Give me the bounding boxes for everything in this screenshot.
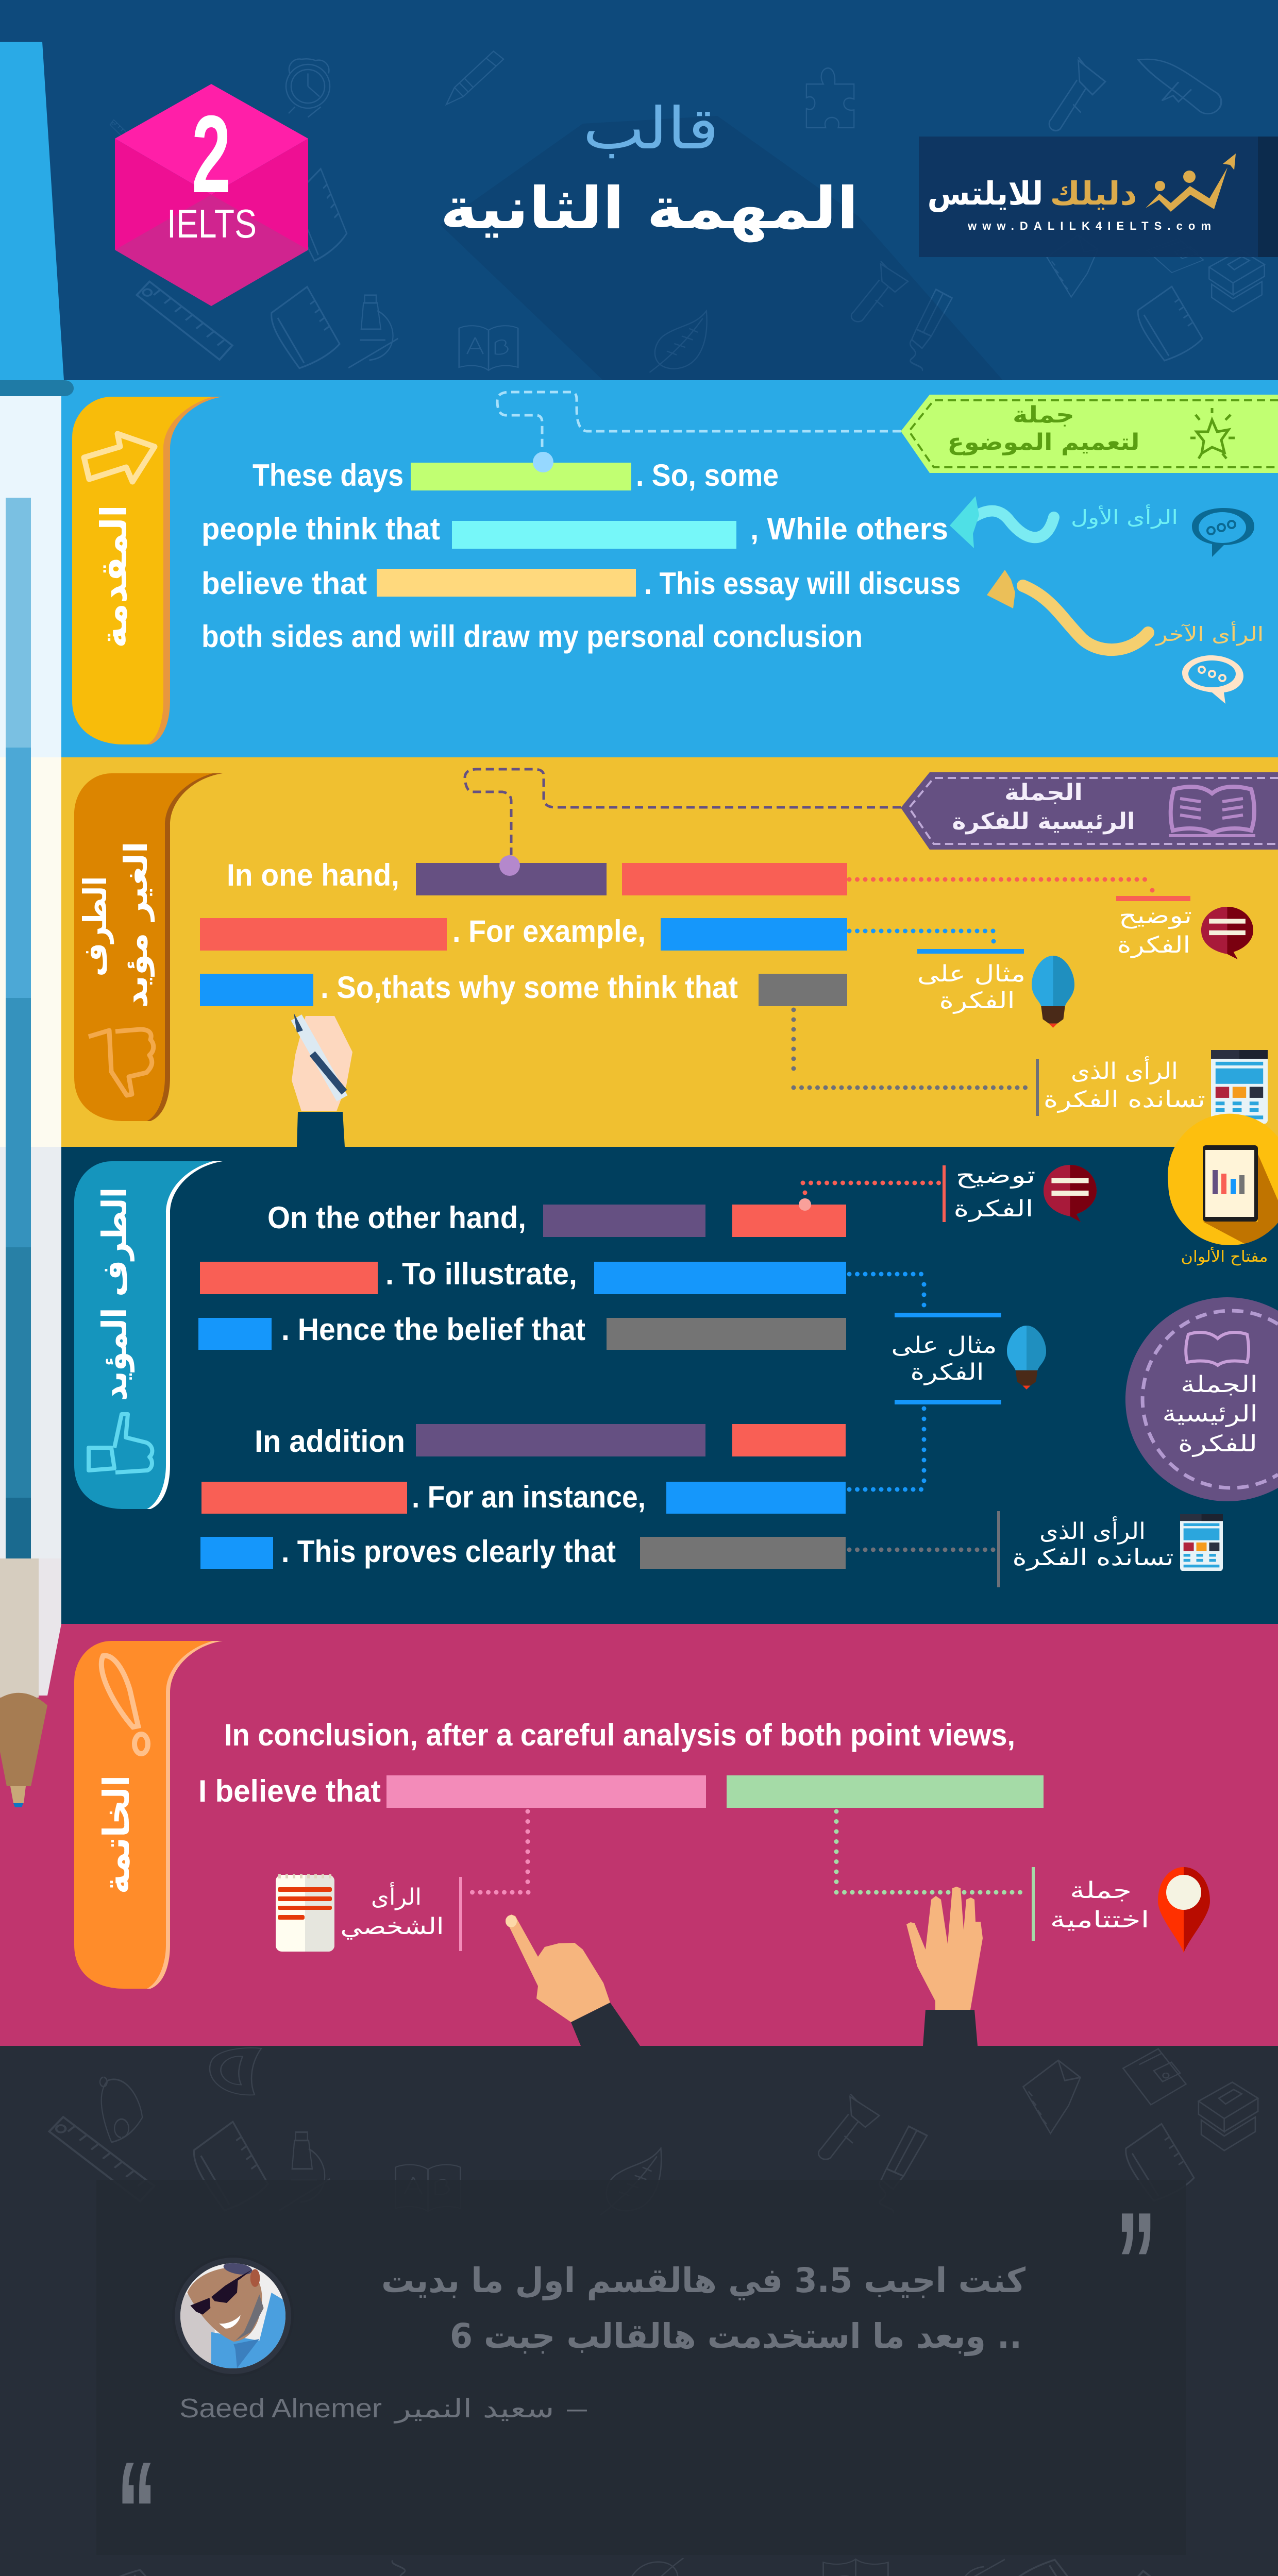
label: closing sentence bbox=[1032, 1867, 1149, 1941]
tab: against side bbox=[74, 773, 223, 1121]
label: explanation: توضيح bbox=[955, 1162, 1036, 1189]
ielts hexagon badge: IELTS bbox=[167, 201, 257, 246]
label: supported opinion bbox=[997, 1511, 1174, 1587]
connector dot bbox=[499, 855, 520, 876]
badge: main sentence: الرئيسية للفكرة bbox=[952, 808, 1135, 835]
label: example bbox=[917, 949, 1025, 1014]
quote text: كنت اجيب 3.5 في هالقسم اول ما بديت bbox=[381, 2261, 1026, 2301]
text: supporting side paragraph: . For an instance, bbox=[412, 1480, 646, 1514]
section strip: introduction bbox=[61, 380, 1278, 757]
text: introduction paragraph: . This essay will discuss bbox=[644, 566, 961, 601]
tab label: against side bbox=[76, 842, 155, 1008]
connector: main sentence bbox=[465, 769, 901, 855]
badge: main sentence: الجملة bbox=[1004, 779, 1083, 806]
text: introduction paragraph: people think that bbox=[201, 512, 440, 546]
tab label: introduction: المقدمة bbox=[93, 505, 135, 648]
author name: سعيد النمير bbox=[393, 2394, 554, 2424]
icon: document bbox=[1211, 1050, 1268, 1124]
connector dot bbox=[533, 452, 553, 472]
badge: topic sentence: لتعميم الموضوع bbox=[947, 429, 1140, 455]
label: example: الفكرة bbox=[939, 988, 1015, 1014]
label: supported opinion: تسانده الفكرة bbox=[1012, 1545, 1174, 1571]
icon: exclamation mark bbox=[102, 1656, 148, 1754]
logo panel: www.DALILK4IELTS.com bbox=[967, 219, 1211, 232]
text: against side paragraph: In one hand, bbox=[227, 858, 399, 892]
circle: main sentence: للفكرة bbox=[1178, 1431, 1257, 1457]
left pen tube bbox=[0, 42, 74, 396]
text: introduction paragraph bbox=[201, 458, 961, 654]
icon: open book bbox=[1186, 1332, 1249, 1365]
connector: topic sentence bbox=[497, 392, 901, 451]
closing quote mark: ” bbox=[1116, 2183, 1156, 2344]
label: explanation: توضيح bbox=[1119, 903, 1192, 929]
header background bbox=[0, 0, 1278, 380]
tab label: against side: الغير مؤيد bbox=[117, 842, 155, 1008]
icon: thumb up bbox=[89, 1414, 152, 1472]
icon: notepad bbox=[276, 1875, 334, 1952]
quote text: .. وبعد ما استخدمت هالقالب جبت 6 bbox=[450, 2316, 1022, 2357]
label: example: الفكرة bbox=[910, 1359, 984, 1385]
title bbox=[440, 95, 859, 242]
circle: main sentence bbox=[1125, 1297, 1278, 1501]
logo panel: للايلتس bbox=[928, 175, 1043, 212]
circle: main sentence: الرئيسية bbox=[1163, 1401, 1257, 1427]
icon: open book bbox=[1171, 787, 1254, 834]
panel: testimonial bbox=[110, 2180, 1186, 2504]
text: supporting side paragraph: On the other hand, bbox=[267, 1200, 526, 1235]
avatar photo bbox=[175, 2258, 291, 2374]
logo panel bbox=[919, 137, 1278, 257]
label: explanation bbox=[943, 1162, 1036, 1222]
tab label: against side: الطرف bbox=[76, 876, 114, 977]
label: supported opinion bbox=[1036, 1056, 1205, 1116]
label: supported opinion: الرأى الذى bbox=[1071, 1056, 1178, 1084]
pen column bbox=[0, 396, 61, 1807]
title: المهمة الثانية bbox=[440, 175, 859, 242]
text: supporting side paragraph: . Hence the belief that bbox=[281, 1312, 585, 1347]
author name: Saeed Alnemer bbox=[179, 2394, 382, 2424]
badge: topic sentence: جملة bbox=[1013, 402, 1074, 428]
label: example: مثال على bbox=[917, 961, 1025, 987]
icon: speech bubble dark bbox=[1192, 508, 1254, 557]
hand holding pen bbox=[292, 1013, 352, 1147]
label: personal opinion bbox=[340, 1877, 462, 1951]
open hand bbox=[906, 1887, 983, 2046]
label: supported opinion: تسانده الفكرة bbox=[1044, 1087, 1205, 1113]
text: introduction paragraph: These days bbox=[253, 458, 403, 493]
tab label: supporting side: الطرف المؤيد bbox=[95, 1187, 135, 1401]
dotted connector: personal opinion bbox=[466, 1811, 528, 1892]
text: conclusion: In conclusion, after a careful analysis of both point views, bbox=[224, 1718, 1015, 1752]
label: example: مثال على bbox=[892, 1332, 997, 1359]
fill-in blocks: supporting side bbox=[198, 1205, 846, 1569]
text: introduction paragraph: believe that bbox=[201, 566, 367, 601]
icon: equals bubble bbox=[1201, 907, 1253, 959]
arrow: other opinion bbox=[987, 570, 1148, 650]
text: supporting side paragraph: . To illustrate, bbox=[385, 1257, 577, 1291]
text: conclusion: I believe that bbox=[198, 1774, 381, 1808]
dotted connector: explanation bbox=[849, 879, 1152, 892]
section strip: conclusion bbox=[0, 1624, 1278, 2046]
footer doodles bbox=[26, 2048, 1258, 2576]
text: against side paragraph: . For example, bbox=[452, 914, 646, 948]
label: explanation: الفكرة bbox=[1117, 932, 1190, 958]
icon: equals bubble bbox=[1044, 1165, 1097, 1222]
ielts hexagon badge bbox=[115, 84, 308, 306]
dotted connector: supported opinion bbox=[794, 1010, 1032, 1088]
dotted connector: supported opinion bbox=[849, 1548, 997, 1552]
dotted connector: example bbox=[849, 1274, 926, 1489]
badge: main sentence bbox=[901, 772, 1278, 850]
icon: bulb bbox=[1032, 956, 1074, 1028]
label: explanation bbox=[1116, 896, 1192, 958]
text: supporting side paragraph bbox=[255, 1200, 646, 1569]
icon: arrow bbox=[84, 434, 155, 482]
label: first opinion: الرأى الأول bbox=[1071, 504, 1178, 529]
tab: introduction bbox=[72, 397, 223, 744]
circle: main sentence: الجملة bbox=[1181, 1371, 1258, 1398]
text: supporting side paragraph: . This proves clearly that bbox=[281, 1534, 616, 1569]
label: closing sentence: جملة bbox=[1070, 1877, 1132, 1904]
fill-in blocks: conclusion bbox=[386, 1775, 1044, 1808]
dotted connector: closing sentence bbox=[836, 1811, 1023, 1892]
icon: map pin bbox=[1158, 1867, 1210, 1953]
label: explanation: الفكرة bbox=[953, 1196, 1034, 1222]
badge: topic sentence bbox=[901, 395, 1278, 473]
label: personal opinion: الشخصي bbox=[340, 1913, 444, 1940]
label: other opinion: الرأى الآخر bbox=[1155, 621, 1264, 646]
tab: supporting side bbox=[74, 1161, 223, 1509]
author name bbox=[179, 2394, 587, 2424]
text: conclusion bbox=[198, 1718, 1015, 1808]
text: introduction paragraph: , While others bbox=[750, 512, 948, 546]
label: supported opinion: الرأى الذى bbox=[1039, 1516, 1146, 1545]
dotted connector: example bbox=[849, 931, 997, 943]
text: introduction paragraph: both sides and will draw my personal conclusion bbox=[201, 619, 863, 654]
fill-in blocks: against side bbox=[200, 863, 847, 1006]
author name: – bbox=[567, 2394, 587, 2424]
title: قالب bbox=[583, 95, 719, 162]
text: introduction paragraph: . So, some bbox=[636, 458, 779, 493]
pointing hand bbox=[506, 1914, 640, 2046]
label: closing sentence: اختتامية bbox=[1050, 1907, 1149, 1933]
colour key circle: مفتاح الألوان bbox=[1181, 1246, 1268, 1266]
icon: star bbox=[1190, 408, 1235, 459]
dotted connector: explanation bbox=[799, 1183, 940, 1211]
logo icon bbox=[1146, 154, 1236, 212]
fill-in blocks: introduction bbox=[377, 463, 736, 597]
label: example bbox=[892, 1313, 1001, 1404]
icon: bulb bbox=[1007, 1326, 1046, 1389]
title long shadow bbox=[440, 116, 1003, 380]
logo panel: دليلك bbox=[1050, 175, 1137, 212]
label: personal opinion: الرأى bbox=[371, 1882, 422, 1910]
text: against side paragraph: . So,thats why some think that bbox=[321, 970, 738, 1005]
footer background bbox=[0, 2046, 1278, 2576]
tab: conclusion bbox=[74, 1641, 223, 1989]
arrow: first opinion bbox=[950, 496, 1054, 548]
section strip: against side bbox=[61, 757, 1278, 1147]
icon: thumb down bbox=[89, 1029, 154, 1095]
section strip: supporting side bbox=[61, 1147, 1278, 1624]
icon: document bbox=[1180, 1514, 1223, 1571]
colour key circle bbox=[1168, 1114, 1278, 1266]
tab label: conclusion: الخاتمة bbox=[95, 1775, 138, 1894]
quote text bbox=[381, 2261, 1026, 2357]
text: supporting side paragraph: In addition bbox=[255, 1424, 405, 1459]
text: against side paragraph bbox=[227, 858, 738, 1005]
icon: speech bubble cream bbox=[1182, 655, 1243, 704]
ielts hexagon badge: 2 bbox=[192, 93, 231, 216]
